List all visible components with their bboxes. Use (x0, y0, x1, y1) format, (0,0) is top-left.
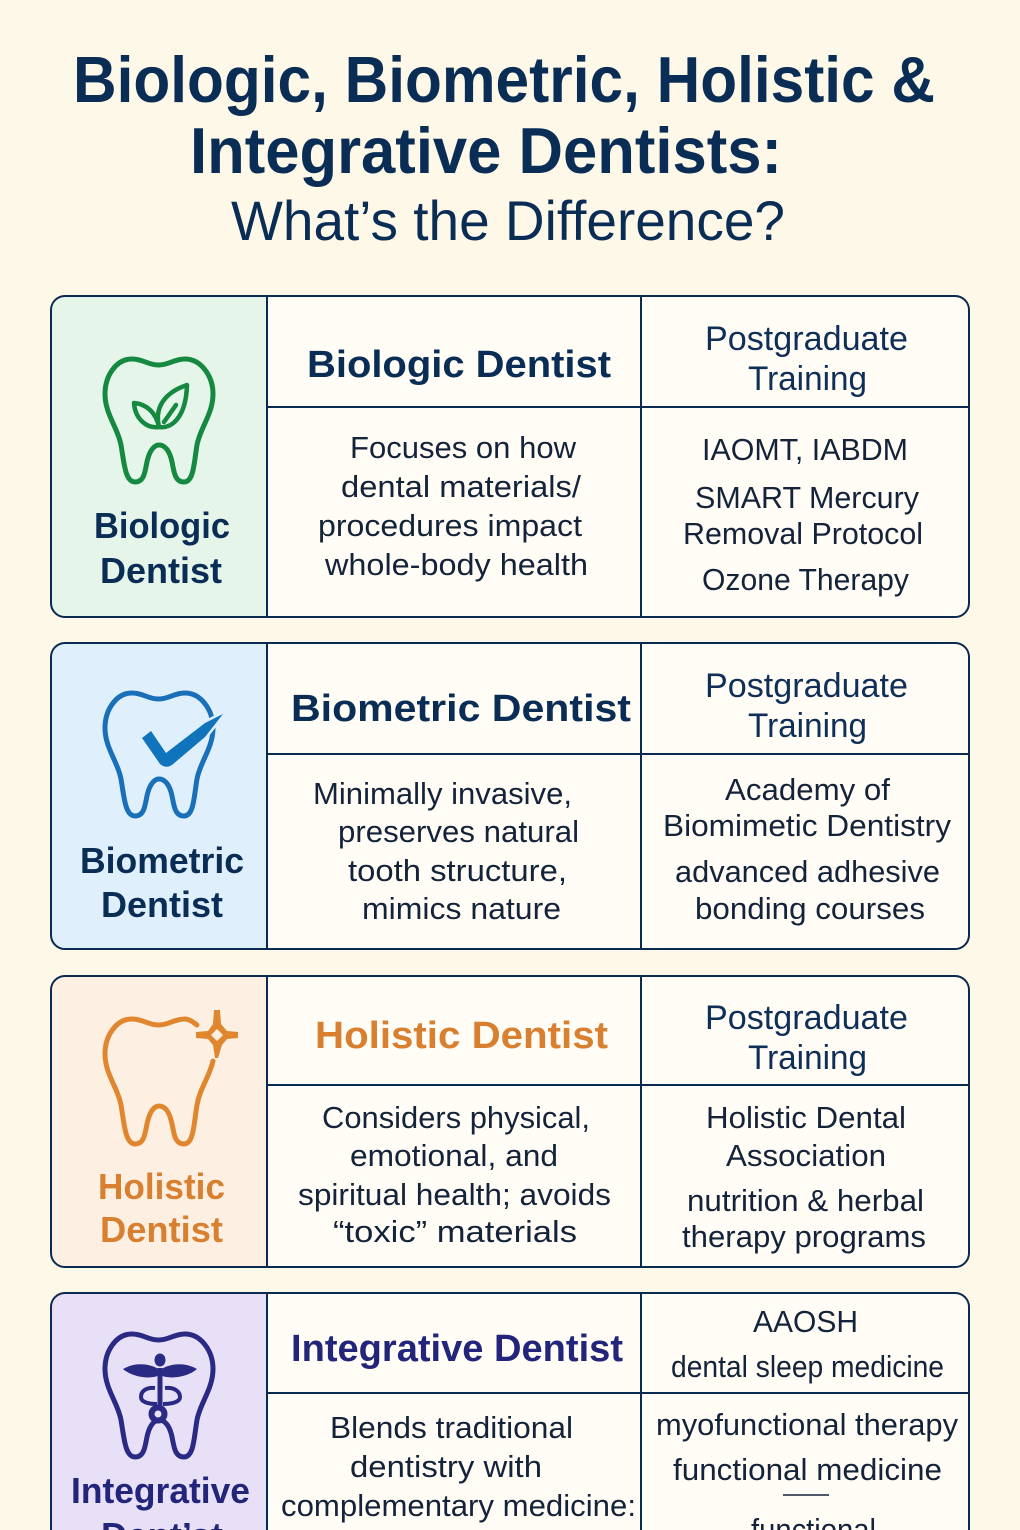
training list (663, 772, 952, 926)
heading: Biologic Dentist: Biologic Dentist (307, 344, 611, 386)
heading: Integrative Dentist: Integrative Dentist (291, 1328, 623, 1370)
training list: Biomimetic Dentistry (663, 808, 952, 843)
icon: tooth with sparkle (105, 1010, 238, 1144)
column heading: Postgraduate Training: Postgraduate (705, 320, 908, 358)
description (313, 776, 579, 926)
training heading items: dental sleep medicine (671, 1349, 944, 1384)
training list (682, 1100, 926, 1254)
heading: Holistic Dentist: Holistic Dentist (315, 1015, 608, 1057)
description: procedures impact (318, 508, 582, 543)
training list: nutrition & herbal (687, 1183, 924, 1218)
training list: advanced adhesive (675, 854, 940, 889)
training list: Ozone Therapy (702, 562, 909, 597)
training heading items (671, 1304, 944, 1384)
training list: Association (726, 1138, 886, 1173)
title: Integrative Dentists: (190, 114, 782, 187)
description (298, 1100, 611, 1249)
title (73, 43, 935, 252)
description: Blends traditional (330, 1410, 573, 1445)
description: emotional, and (350, 1138, 558, 1173)
panel: biometric dentist (51, 643, 969, 949)
icon: tooth with leaf (105, 359, 213, 482)
description: complementary medicine: (281, 1488, 636, 1523)
side label: Biometric Dentist: Biometric (80, 840, 244, 881)
training list: therapy programs (682, 1219, 926, 1254)
description (318, 430, 588, 582)
training list: bonding courses (695, 891, 925, 926)
side label: Biometric Dentist: Dentist (101, 884, 223, 925)
description: spiritual health; avoids (298, 1177, 611, 1212)
column heading: Postgraduate Training: Training (748, 360, 867, 398)
side label: Holistic Dentist (98, 1166, 225, 1250)
description: dental materials/ (341, 469, 581, 504)
training list: SMART Mercury (695, 480, 919, 515)
description: Minimally invasive, (313, 776, 572, 811)
column heading: Postgraduate Training: Training (748, 707, 867, 745)
training heading items: AAOSH (753, 1304, 858, 1339)
icon: tooth with check mark (105, 693, 223, 816)
description (281, 1410, 636, 1523)
description: dentistry with (350, 1449, 542, 1484)
side label: Holistic Dentist: Holistic (98, 1166, 225, 1207)
description: whole-body health (324, 547, 588, 582)
panel: integrative dentist (51, 1293, 969, 1530)
training list: IAOMT, IABDM (702, 432, 908, 467)
column heading: Postgraduate Training (705, 999, 908, 1077)
column heading: Postgraduate Training: Training (748, 1039, 867, 1077)
panel: holistic dentist (51, 976, 969, 1267)
side label: Holistic Dentist: Dentist (100, 1209, 223, 1250)
title: What’s the Difference? (231, 189, 785, 252)
icon: tooth with caduceus (105, 1334, 213, 1457)
column heading: Postgraduate Training (705, 320, 908, 398)
training list: functional medicine (673, 1452, 942, 1487)
description: tooth structure, (348, 853, 567, 888)
side label: Integrative Dentist: Integrative (71, 1470, 250, 1511)
column heading: Postgraduate Training: Postgraduate (705, 999, 908, 1037)
description: Focuses on how (350, 430, 577, 465)
description: Considers physical, (322, 1100, 590, 1135)
training list: Academy of (725, 772, 890, 807)
heading: Biometric Dentist: Biometric Dentist (291, 688, 631, 730)
training list: Holistic Dental (706, 1100, 906, 1135)
column heading: Postgraduate Training (705, 667, 908, 745)
side label: Biologic Dentist: Dentist (100, 550, 222, 591)
training list (656, 1407, 958, 1530)
side label: Integrative Dentist (71, 1470, 250, 1530)
side label: Biologic Dentist (94, 505, 230, 591)
description: preserves natural (338, 814, 579, 849)
side label: Biometric Dentist (80, 840, 244, 925)
side label: Biologic Dentist: Biologic (94, 505, 230, 546)
description: “toxic” materials (333, 1214, 577, 1249)
panel: biologic dentist (51, 296, 969, 617)
description: mimics nature (362, 891, 561, 926)
column heading: Postgraduate Training: Postgraduate (705, 667, 908, 705)
training list (683, 432, 923, 597)
title: Biologic, Biometric, Holistic & (73, 43, 935, 116)
training list: Removal Protocol (683, 516, 923, 551)
training list: myofunctional therapy (656, 1407, 958, 1442)
